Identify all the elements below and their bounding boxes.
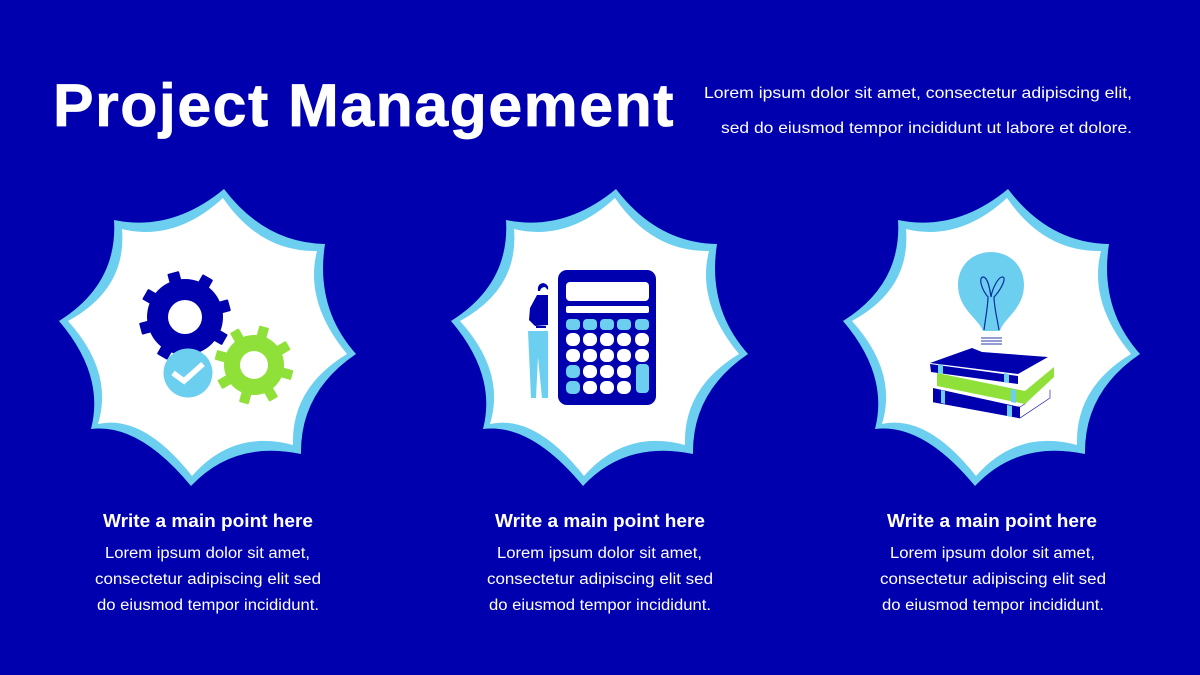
panel: idea [843,189,1140,614]
body text: Lorem ipsum dolor sit amet, [105,545,310,562]
body text [95,545,321,614]
body text: Lorem ipsum dolor sit amet, [497,545,702,562]
body text: consectetur adipiscing elit sed [880,571,1106,588]
body text [880,545,1106,614]
star badge [59,189,356,486]
body text: Lorem ipsum dolor sit amet, [890,545,1095,562]
body text: do eiusmod tempor incididunt. [489,597,711,614]
icon: books [930,348,1054,418]
icon: check badge [164,348,212,398]
body text: consectetur adipiscing elit sed [95,571,321,588]
body text: do eiusmod tempor incididunt. [97,597,319,614]
heading: Write a main point here [495,510,705,531]
panel: calculator [451,189,748,614]
body text: do eiusmod tempor incididunt. [882,597,1104,614]
star badge [451,189,748,486]
heading: Write a main point here [887,510,1097,531]
intro text: sed do eiusmod tempor incididunt ut labore et dolore. [721,120,1132,137]
star badge [843,189,1140,486]
body text: consectetur adipiscing elit sed [487,571,713,588]
icon: green gear [215,326,293,404]
panel: gears [59,189,356,614]
intro text: Lorem ipsum dolor sit amet, consectetur adipiscing elit, [704,85,1132,102]
icon: calculator [558,270,656,405]
icon: person [528,283,548,398]
intro text [704,85,1132,137]
body text [487,545,713,614]
icon: blue gear [139,271,231,363]
icon: light bulb [958,252,1024,352]
heading: Write a main point here [103,510,313,531]
title: Project Management [53,72,675,139]
